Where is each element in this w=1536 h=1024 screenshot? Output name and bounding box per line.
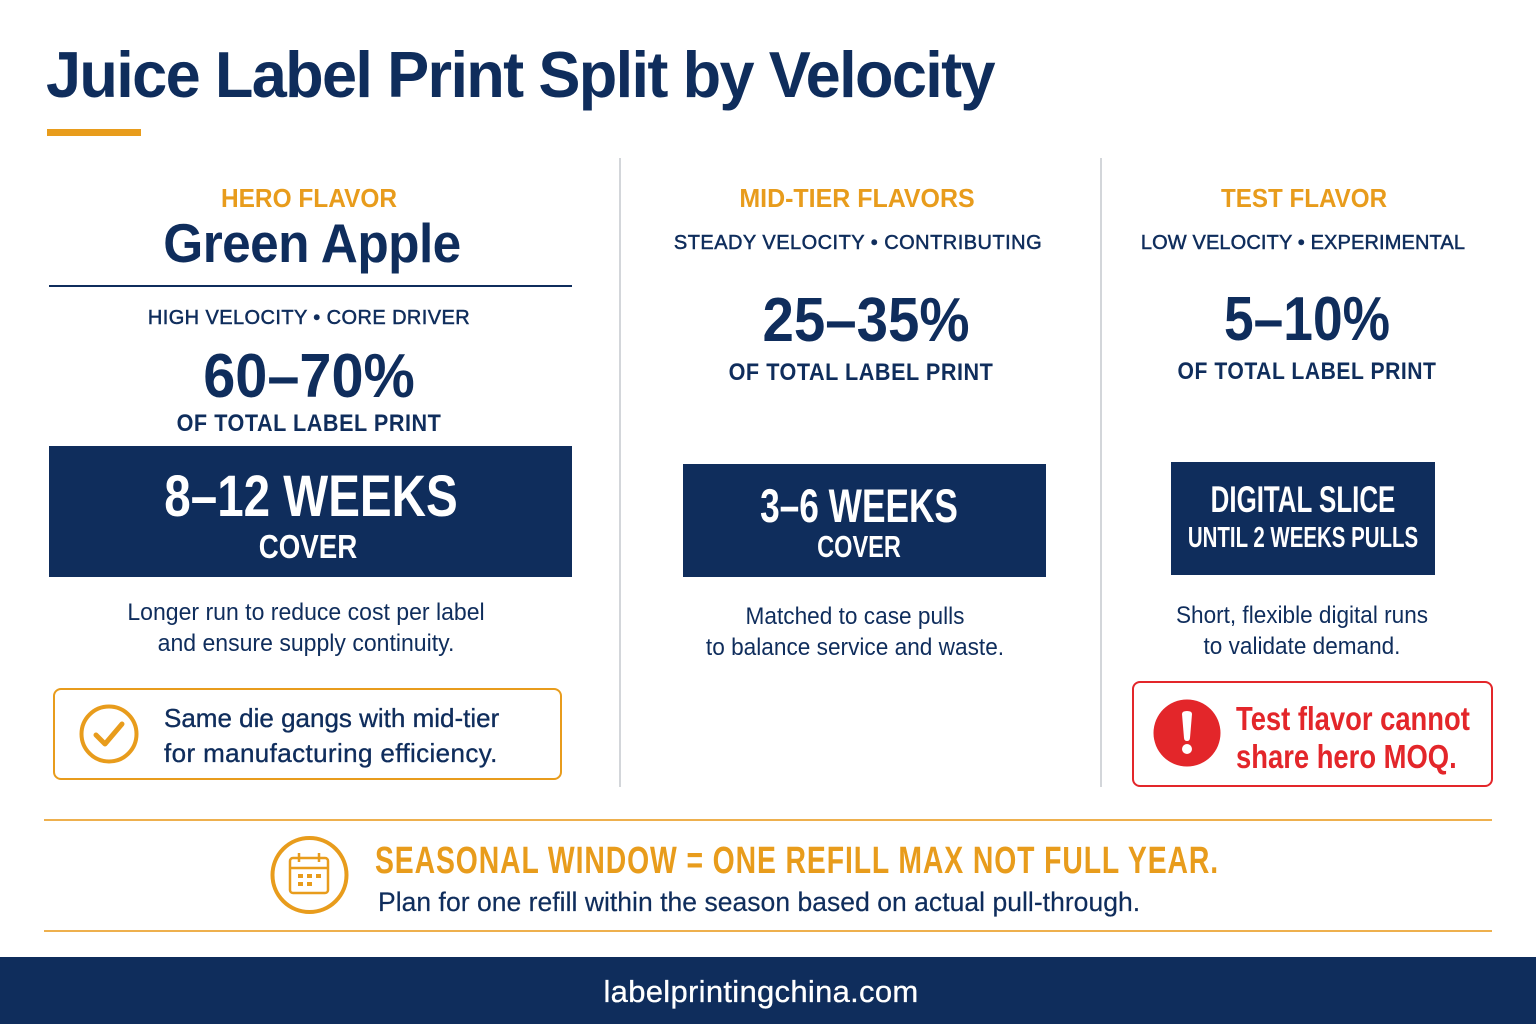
column divider left	[619, 158, 621, 787]
hero description: and ensure supply continuity.	[158, 630, 454, 657]
test digital detail: UNTIL 2 WEEKS PULLS	[1188, 522, 1418, 554]
hero rule	[49, 285, 572, 287]
hero callout text	[164, 703, 500, 768]
seasonal subtext: Plan for one refill within the season based on actual pull-through.	[378, 887, 1140, 917]
warning text	[1236, 700, 1470, 775]
test description: Short, flexible digital runs	[1176, 602, 1428, 629]
hero percentage: 60–70%	[203, 342, 415, 411]
warning text: share hero MOQ.	[1236, 738, 1457, 775]
footer url: labelprintingchina.com	[603, 974, 919, 1009]
hero cover box	[49, 446, 572, 577]
test description: to validate demand.	[1204, 633, 1400, 660]
icon: calendar	[270, 836, 348, 914]
hero callout text: for manufacturing efficiency.	[164, 738, 498, 768]
panel: test flavor	[1132, 183, 1493, 787]
mid-tier description: to balance service and waste.	[706, 634, 1004, 661]
column divider right	[1100, 158, 1102, 787]
mid-tier cover box	[683, 464, 1046, 577]
title accent bar	[47, 129, 141, 136]
test warning callout	[1132, 681, 1493, 787]
mid-tier percentage: 25–35%	[762, 286, 970, 355]
mid-tier description	[706, 603, 1004, 661]
hero name: Green Apple	[163, 212, 461, 274]
mid-tier cover weeks: 3–6 WEEKS	[760, 479, 958, 532]
mid-tier velocity: STEADY VELOCITY • CONTRIBUTING	[674, 232, 1042, 254]
hero velocity: HIGH VELOCITY • CORE DRIVER	[148, 307, 470, 329]
test label: TEST FLAVOR	[1221, 183, 1387, 213]
mid-tier description: Matched to case pulls	[746, 603, 964, 630]
mid-tier cover word: COVER	[817, 529, 901, 564]
hero label: HERO FLAVOR	[221, 183, 397, 213]
hero cover weeks: 8–12 WEEKS	[164, 464, 458, 529]
warning text: Test flavor cannot	[1236, 700, 1470, 737]
panel: mid-tier flavors	[674, 183, 1046, 661]
test share label: OF TOTAL LABEL PRINT	[1178, 358, 1436, 385]
test percentage: 5–10%	[1224, 285, 1390, 354]
title: Juice Label Print Split by Velocity	[46, 38, 994, 111]
mid-tier share label: OF TOTAL LABEL PRINT	[729, 359, 993, 386]
footer band	[0, 957, 1536, 1024]
test description	[1176, 602, 1428, 660]
mid-tier label: MID-TIER FLAVORS	[739, 183, 975, 213]
icon: warning exclamation	[1154, 700, 1220, 766]
hero callout text: Same die gangs with mid-tier	[164, 703, 499, 733]
hero callout	[53, 688, 562, 780]
hero cover word: COVER	[259, 528, 357, 565]
test velocity: LOW VELOCITY • EXPERIMENTAL	[1141, 232, 1465, 254]
icon: check circle	[80, 704, 138, 764]
test digital heading: DIGITAL SLICE	[1211, 479, 1395, 520]
seasonal headline: SEASONAL WINDOW = ONE REFILL MAX NOT FULL YEAR.	[375, 840, 1219, 882]
test digital box	[1171, 462, 1435, 575]
panel: seasonal window	[44, 819, 1492, 932]
hero description	[127, 599, 485, 657]
panel: hero flavor	[49, 183, 572, 780]
hero share label: OF TOTAL LABEL PRINT	[177, 410, 441, 437]
hero description: Longer run to reduce cost per label	[127, 599, 485, 626]
